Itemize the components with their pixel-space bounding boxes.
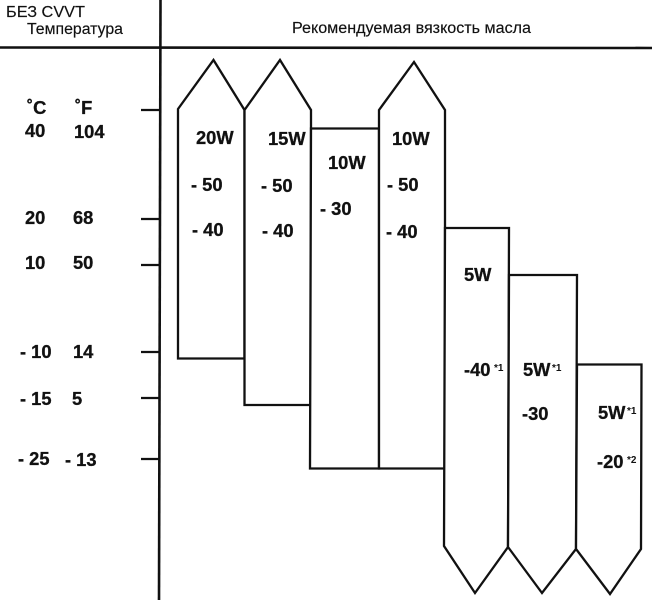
bar: 5W*1 -20*2: *1 — [627, 406, 637, 417]
bar: 5W*1: *1 — [552, 363, 562, 374]
bar: 10W rectangle: - 30 — [320, 198, 352, 219]
bar: 10W rectangle — [310, 128, 379, 468]
scale row -10 / 14: - 10 — [20, 341, 52, 362]
bar: 20W: - 40 — [192, 219, 224, 240]
bar: 10W arrow — [379, 62, 445, 468]
bar: 5W: -40 — [464, 359, 490, 380]
scale row -15 / 5: - 15 — [20, 388, 52, 409]
scale row -15 / 5 — [20, 388, 160, 409]
bar: 5W*1 -20*2: 5W — [598, 402, 626, 423]
bar: 15W: - 40 — [262, 220, 294, 241]
temperature scale — [18, 97, 160, 470]
scale row 10 / 50: 10 — [25, 252, 45, 273]
scale row -10 / 14: 14 — [73, 341, 94, 362]
scale row 40 / 104: 40 — [25, 120, 45, 141]
bar: 10W arrow: - 40 — [386, 221, 418, 242]
bar: 5W*1: -30 — [522, 403, 548, 424]
scale row 10 / 50: 50 — [73, 252, 93, 273]
bar: 5W*1 — [508, 275, 577, 593]
bar: 5W — [444, 228, 509, 593]
scale row -10 / 14 — [20, 341, 160, 362]
scale row 40 / 104 — [25, 110, 160, 142]
bar: 10W rectangle: 10W — [328, 152, 366, 173]
scale row -25 / -13: - 13 — [65, 449, 97, 470]
scale row -15 / 5: 5 — [72, 388, 82, 409]
scale row -25 / -13 — [18, 448, 160, 470]
bar: 10W arrow: - 50 — [387, 174, 419, 195]
heading: temperature: Температура — [27, 21, 123, 38]
heading: БЕЗ CVVT: БЕЗ CVVT — [6, 4, 86, 21]
bar: 5W: 5W — [464, 264, 492, 285]
bar: 15W — [244, 60, 311, 405]
bar: 20W: - 50 — [191, 174, 223, 195]
bar: 15W: 15W — [268, 128, 306, 149]
scale row 20 / 68: 68 — [73, 207, 93, 228]
scale row 40 / 104: 104 — [74, 121, 105, 142]
heading: recommended oil viscosity: Рекомендуемая вязкость масла — [292, 20, 531, 37]
scale row 10 / 50 — [25, 252, 160, 273]
bar: 15W: - 50 — [261, 175, 293, 196]
bar: 20W — [178, 60, 244, 358]
unit labels: ˚F — [75, 97, 92, 118]
unit labels: ˚C — [27, 97, 46, 118]
bar: 5W*1 -20*2: -20 — [597, 451, 623, 472]
bar: 5W*1 -20*2 — [576, 364, 642, 594]
bar: 5W*1: 5W — [523, 359, 551, 380]
bar: 10W arrow: 10W — [392, 128, 430, 149]
scale row -25 / -13: - 25 — [18, 448, 50, 469]
bar: 5W: *1 — [494, 363, 504, 374]
bar: 5W*1 -20*2: *2 — [627, 455, 637, 466]
unit labels — [27, 97, 92, 118]
scale row 20 / 68: 20 — [25, 207, 45, 228]
scale row 20 / 68 — [25, 207, 160, 228]
bar: 20W: 20W — [196, 127, 234, 148]
